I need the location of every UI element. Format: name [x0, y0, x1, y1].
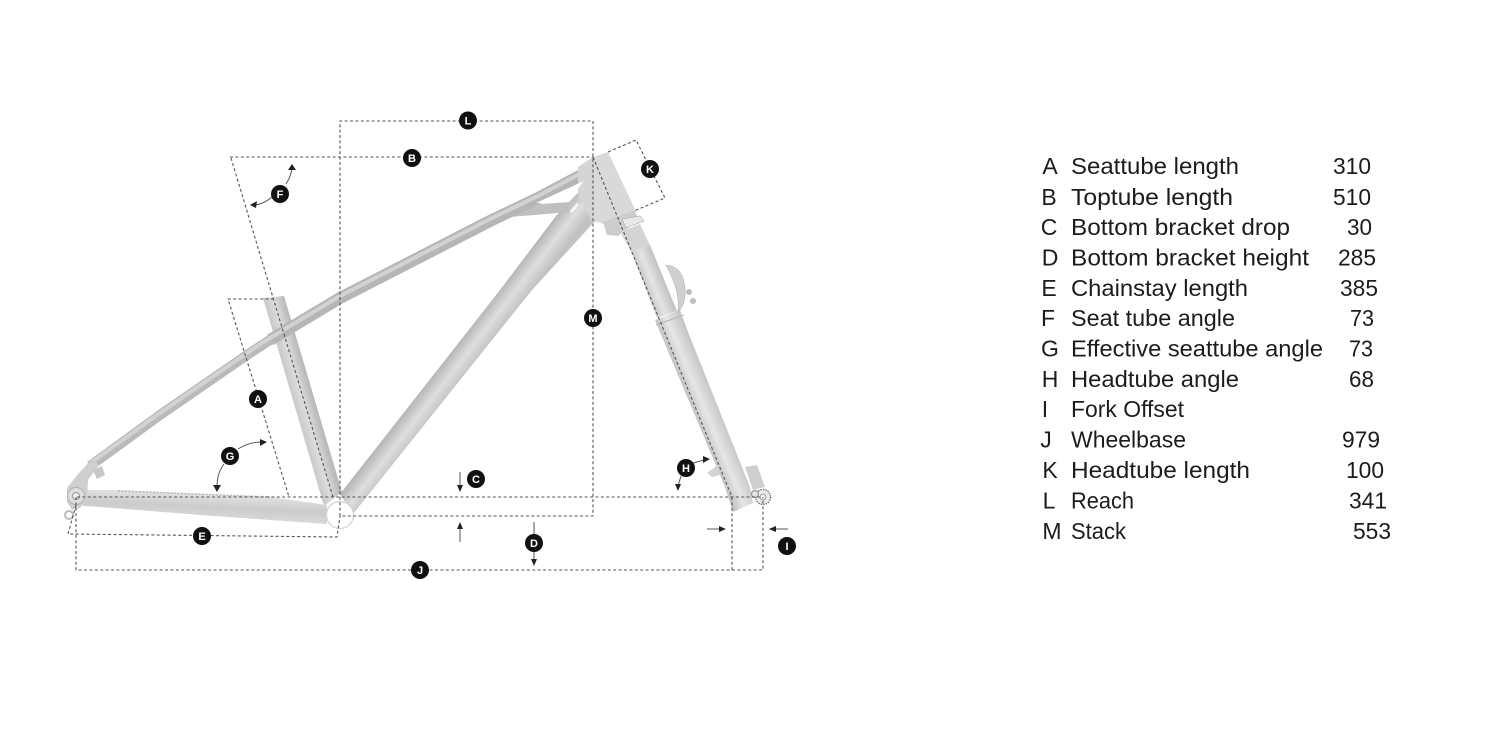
- row H: H: [1042, 366, 1058, 392]
- L reach bracket: [340, 121, 593, 516]
- badge A: A: [254, 394, 262, 406]
- white gap between top tube and brace: [536, 181, 584, 203]
- row K: [1042, 457, 1384, 483]
- row L: 341: [1349, 488, 1387, 514]
- row A: A: [1042, 153, 1058, 179]
- row B: [1041, 184, 1371, 210]
- seat tube: [263, 296, 342, 506]
- row K: K: [1042, 457, 1058, 483]
- front axle: [752, 490, 770, 504]
- row F: 73: [1350, 305, 1374, 331]
- row L: Reach: [1071, 488, 1134, 514]
- row H: Headtube angle: [1071, 366, 1239, 392]
- row D: Bottom bracket height: [1071, 244, 1310, 270]
- chain stay: [83, 490, 327, 524]
- letter badges: [193, 112, 796, 579]
- badge E: [193, 527, 211, 545]
- fork fender mount: [745, 465, 765, 490]
- badge F: [271, 185, 289, 203]
- row E: E: [1041, 275, 1057, 301]
- row D: D: [1042, 244, 1058, 270]
- row J: J: [1040, 426, 1052, 452]
- badge I: I: [785, 541, 789, 553]
- head axis: [593, 157, 732, 497]
- row M: M: [1042, 518, 1062, 544]
- row K: Headtube length: [1071, 457, 1250, 483]
- ground reference: [77, 496, 762, 498]
- seat tube axis: [231, 158, 333, 497]
- badge D: [525, 534, 543, 552]
- bottom bracket: [326, 502, 354, 528]
- row E: [1041, 275, 1378, 301]
- fork lower ring: [656, 315, 684, 325]
- row C: 30: [1347, 214, 1372, 240]
- geometry table: [1040, 153, 1391, 544]
- A seat length: [228, 299, 289, 497]
- B toptube line: [230, 156, 593, 158]
- row G: Effective seattube angle: [1071, 336, 1323, 362]
- row F: Seat tube angle: [1071, 305, 1235, 331]
- row L: L: [1043, 488, 1056, 514]
- row L: [1043, 488, 1387, 514]
- row J: Wheelbase: [1071, 426, 1186, 452]
- C arrows: [457, 472, 463, 542]
- row M: 553: [1353, 518, 1391, 544]
- fork stanchion: [632, 245, 677, 318]
- row C: [1041, 214, 1372, 240]
- F arrows: [250, 164, 296, 208]
- row B: 510: [1333, 184, 1371, 210]
- badge K: [641, 160, 659, 178]
- row J: 979: [1342, 426, 1380, 452]
- seat stay and top tube: [90, 171, 585, 466]
- fork lowers: [655, 310, 753, 512]
- badge A: [249, 390, 267, 408]
- row F: [1041, 305, 1374, 331]
- row I: Fork Offset: [1071, 396, 1185, 422]
- D arrows: [531, 522, 537, 566]
- badge C: C: [472, 474, 480, 486]
- badge H: H: [682, 463, 690, 475]
- highlight on junction: [571, 204, 578, 212]
- row M: Stack: [1071, 518, 1126, 544]
- arrows: [213, 164, 788, 566]
- row A: [1042, 153, 1371, 179]
- row B: B: [1041, 184, 1057, 210]
- badge M: [584, 309, 602, 327]
- badge M: M: [588, 313, 598, 325]
- row A: 310: [1333, 153, 1371, 179]
- K bracket: [608, 140, 665, 211]
- row D: [1042, 244, 1376, 270]
- row F: F: [1041, 305, 1055, 331]
- row B: Toptube length: [1071, 184, 1233, 210]
- I arrows: [707, 526, 788, 532]
- badge L: [459, 112, 477, 130]
- badge I: [778, 537, 796, 555]
- row G: G: [1041, 336, 1059, 362]
- badge F: F: [277, 189, 284, 201]
- badge J: [411, 561, 429, 579]
- fork brake post: [707, 465, 720, 477]
- J wheelbase: [76, 497, 763, 570]
- badge E: E: [198, 531, 206, 543]
- badge J: J: [417, 565, 423, 577]
- bike frame and fork illustration: [65, 152, 770, 528]
- badge G: [221, 447, 239, 465]
- row E: Chainstay length: [1071, 275, 1248, 301]
- row J: [1040, 426, 1380, 452]
- badge L: L: [465, 116, 472, 128]
- headset: [603, 210, 638, 236]
- row I: I: [1042, 396, 1048, 422]
- badge G: G: [226, 451, 234, 463]
- badge D: D: [530, 538, 538, 550]
- dimension lines: [68, 121, 763, 570]
- row H: 68: [1349, 366, 1374, 392]
- E bracket: [68, 505, 340, 537]
- fork seal: [620, 224, 650, 253]
- down tube: [340, 180, 596, 514]
- headset clamp: [622, 216, 644, 228]
- G arrows: [213, 439, 267, 492]
- row H: [1042, 366, 1374, 392]
- row G: 73: [1349, 336, 1373, 362]
- head tube junction: [578, 157, 600, 222]
- H arrows: [675, 456, 710, 491]
- badge B: B: [408, 153, 416, 165]
- badge H: [677, 459, 695, 477]
- row M: [1042, 518, 1391, 544]
- badge C: [467, 470, 485, 488]
- row C: Bottom bracket drop: [1071, 214, 1290, 240]
- row D: 285: [1338, 244, 1376, 270]
- rear dropout: [65, 458, 105, 519]
- chain stay teeth: [118, 491, 270, 497]
- row K: 100: [1346, 457, 1384, 483]
- brake caliper: [666, 265, 696, 312]
- row E: 385: [1340, 275, 1378, 301]
- badge K: K: [646, 164, 654, 176]
- head tube: [593, 152, 636, 224]
- gusset brace: [510, 202, 570, 217]
- row C: C: [1041, 214, 1057, 240]
- row A: Seattube length: [1071, 153, 1239, 179]
- badge B: [403, 149, 421, 167]
